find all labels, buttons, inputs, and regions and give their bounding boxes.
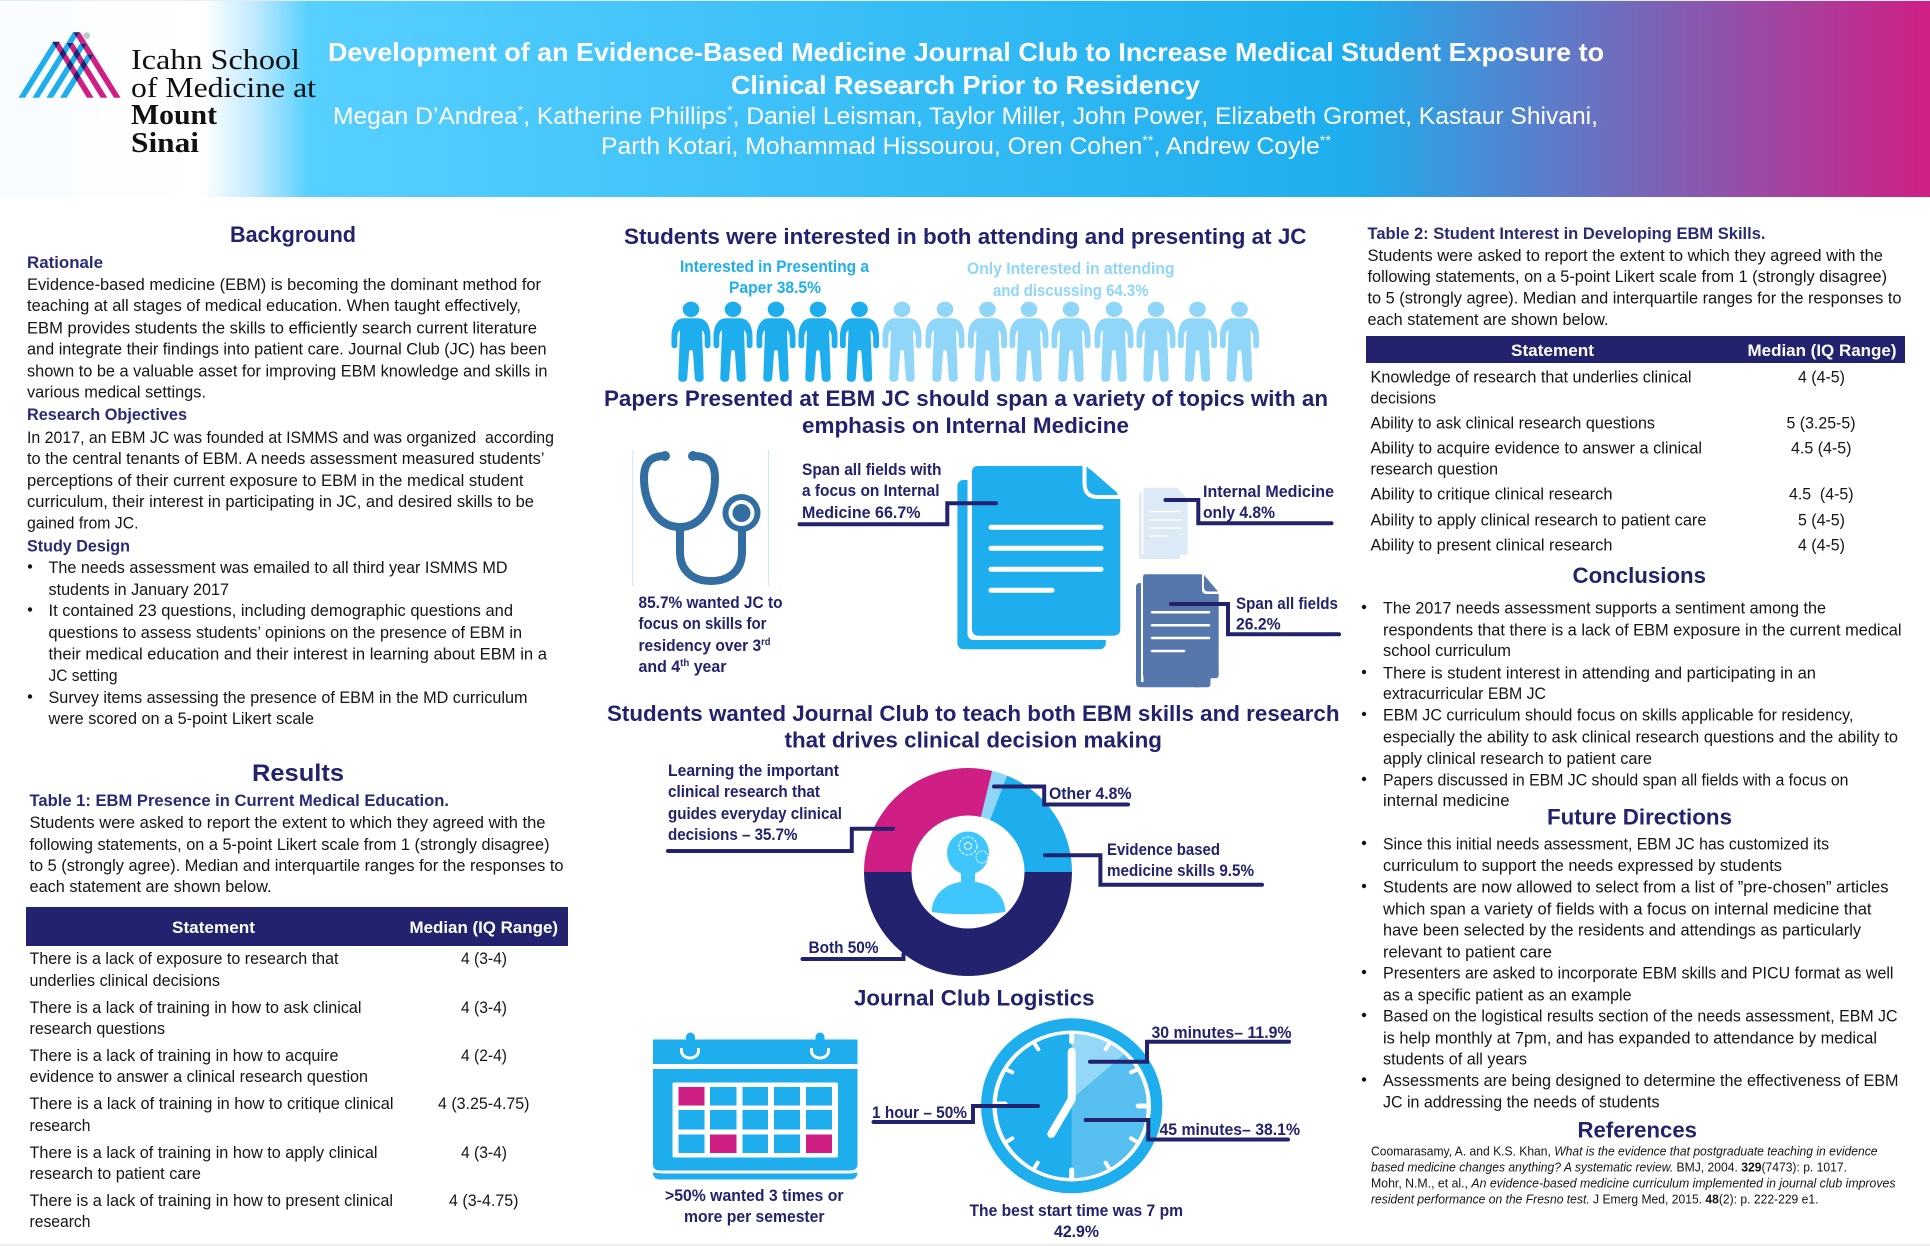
leader line: internal medicine only [1166, 500, 1332, 523]
bullet list: conclusions: apply clinical research to patient care [1383, 750, 1652, 768]
heading: Results: Results [252, 760, 344, 787]
table 1 rows: There is a lack of training in how to present clinical [30, 1192, 393, 1210]
bullet list: study design: students in January 2017 [48, 581, 229, 599]
bullet list: conclusions: respondents that there is a lack of EBM exposure in the current medical [1383, 622, 1902, 640]
segment: both 50% [864, 872, 1072, 976]
label: presenting 38.5%: Paper 38.5% [729, 279, 821, 297]
authors: Megan D’Andrea [333, 103, 513, 130]
text: best start time [970, 1202, 1183, 1241]
text block: rationale: various medical settings. [27, 384, 206, 402]
bullet list: conclusions: extracurricular EBM JC [1383, 685, 1546, 703]
table 1 rows: research [30, 1117, 90, 1135]
panel: journal club logistics [653, 986, 1300, 1241]
text block: reference list: based medicine changes anything? A systematic review. BMJ, 2004. 329(7473): p. 1017. [1371, 1160, 1847, 1174]
authors: * [518, 102, 524, 118]
text block: rationale: teaching at all stages of medical education. When taught effectively, [27, 297, 521, 315]
table 2 rows: 4.5 (4-5) [1791, 440, 1852, 458]
text: frequency: >50% wanted 3 times or [665, 1187, 844, 1205]
table 2 rows: research question [1370, 460, 1498, 478]
text block: reference list [1371, 1144, 1896, 1206]
authors: , Katherine Phillips [523, 103, 727, 130]
text block: rationale: Evidence-based medicine (EBM) is becoming the dominant method for [27, 276, 542, 294]
text block: table 2 intro: to 5 (strongly agree). Median and interquartile ranges for the responses to [1368, 290, 1902, 308]
subheading: Rationale: Rationale [27, 254, 103, 272]
table 1 header [26, 907, 568, 946]
icon: calendar [653, 1032, 858, 1180]
text block: table 2 intro: following statements, on a 5-point Likert scale from 1 (strongly disagree) [1368, 268, 1887, 286]
bullet list: future directions: Presenters are asked to incorporate EBM skills and PICU format as well [1383, 964, 1894, 982]
pictogram: 14 people [672, 302, 1259, 382]
leader line: other [994, 786, 1128, 804]
callout: span all fields 26.2%: 26.2% [1236, 615, 1281, 633]
text block: rationale: and integrate their findings into patient care. Journal Club (JC) has been [27, 340, 546, 358]
table 1 rows: There is a lack of training in how to acquire [30, 1047, 338, 1065]
table 1 rows: research [30, 1213, 90, 1231]
icon: small light document [1139, 488, 1188, 559]
bullet list: study design [28, 559, 548, 728]
panel: conclusions [1362, 563, 1902, 810]
text: skills focus 85.7%: focus on skills for [638, 615, 767, 633]
bullet list: conclusions: The 2017 needs assessment supports a sentiment among the [1383, 600, 1826, 618]
heading: paper topics: emphasis on Internal Medicine [802, 413, 1129, 438]
logo wordmark: of Medicine at [131, 72, 316, 104]
authors: ** [1320, 132, 1332, 148]
panel: future directions [1362, 804, 1898, 1112]
text: skills focus 85.7%: 85.7% wanted JC to [638, 594, 782, 612]
heading: Background: Background [230, 222, 356, 247]
leader line: EBM skills [1045, 855, 1262, 885]
callout: learning clinical research 35.7%: guides everyday clinical [668, 805, 842, 823]
panel: results and table 1 [26, 760, 568, 1231]
callout: internal medicine only 4.8%: Internal Medicine [1203, 483, 1334, 501]
bullet list: conclusions: EBM JC curriculum should focus on skills applicable for residency, [1383, 706, 1854, 724]
logo: Icahn School of Medicine at Mount Sinai [18, 32, 316, 159]
table 1 header: Median (IQ Range) [410, 919, 558, 937]
table 2 [1366, 336, 1905, 554]
leader line: 1 hour [874, 1106, 1038, 1122]
table 2 rows: decisions [1370, 390, 1436, 408]
label: 1 hour 50%: 1 hour – 50% [872, 1104, 967, 1122]
text: skills focus 85.7%: residency over 3 [638, 637, 769, 655]
title: Clinical Research Prior to Residency [731, 70, 1201, 100]
bullet list: study design: It contained 23 questions, including demographic questions and [48, 602, 513, 620]
table 2 header: Statement [1511, 342, 1595, 360]
callout: EBM skills 9.5%: medicine skills 9.5% [1107, 862, 1254, 880]
table 1 rows: There is a lack of exposure to research that [30, 950, 339, 968]
bullet list: conclusions: especially the ability to ask clinical research questions and the ability to [1383, 728, 1898, 746]
text: skills focus 85.7% [638, 594, 782, 676]
sector: 30 minutes [1072, 1034, 1124, 1099]
table 2 header [1366, 336, 1905, 363]
icon: clock [981, 1018, 1162, 1193]
text block: table 2 intro [1368, 247, 1902, 329]
bullet list: study design: JC setting [48, 667, 118, 685]
text block: reference list: Coomarasamy, A. and K.S. Khan, What is the evidence that postgraduate teaching in evidence [1371, 1144, 1878, 1158]
table 1 rows: underlies clinical decisions [30, 972, 220, 990]
logo wordmark [131, 44, 316, 159]
text block: rationale: EBM provides students the skills to efficiently search current literature [27, 320, 537, 338]
text: skills focus 85.7%: and 4 [638, 658, 682, 676]
bullet list: conclusions [1362, 600, 1902, 810]
text block: research objectives [27, 429, 554, 532]
icon: logo stripes [18, 32, 121, 98]
label: presenting 38.5%: Interested in Presenting a [680, 258, 870, 276]
logo wordmark: Sinai [131, 127, 199, 159]
label: 30 minutes 11.9%: 30 minutes– 11.9% [1152, 1024, 1292, 1042]
leader line: span all fields [1171, 604, 1339, 634]
bullet list: future directions: Assessments are being designed to determine the effectiveness of EBM [1383, 1072, 1898, 1090]
bullet list: future directions: as a specific patient as an example [1383, 986, 1632, 1004]
subheading: Table 2: Table 2: Student Interest in Developing EBM Skills. [1368, 225, 1766, 243]
callout: EBM skills 9.5%: Evidence based [1107, 841, 1220, 859]
authors: * [727, 102, 733, 118]
text block: table 1 intro: each statement are shown below. [30, 878, 272, 896]
table 2 rows: 5 (3.25-5) [1786, 414, 1856, 432]
authors: , Daniel Leisman, Taylor Miller, John Power, Elizabeth Gromet, Kastaur Shivani, [733, 103, 1598, 130]
callout: learning clinical research 35.7% [668, 762, 842, 844]
panel: what JC should teach [607, 701, 1340, 976]
text: skills focus 85.7%: rd [761, 637, 770, 648]
callout: all fields with internal medicine focus: Medicine 66.7% [802, 504, 921, 522]
leader line: large document [800, 503, 996, 524]
heading: Future Directions: Future Directions [1547, 804, 1732, 830]
table 2 rows: Ability to present clinical research [1370, 536, 1612, 554]
callout: other 4.8%: Other 4.8% [1049, 785, 1132, 803]
bullet list: study design: Survey items assessing the presence of EBM in the MD curriculum [48, 689, 528, 707]
text block: research objectives: curriculum, their interest in participating in JC, and desired skills to be [27, 493, 534, 511]
leader line: clinical research [668, 829, 893, 851]
leader line: both [802, 954, 904, 959]
heading: logistics: Journal Club Logistics [854, 986, 1094, 1010]
bullet list: future directions: JC in addressing the needs of students [1383, 1094, 1660, 1112]
heading: EBM skills and research: that drives clinical decision making [784, 728, 1162, 752]
callout: learning clinical research 35.7%: decisions – 35.7% [668, 826, 798, 844]
icons: presenting people [672, 302, 879, 382]
callout: both 50%: Both 50% [808, 939, 879, 957]
text block: research objectives: to the central tenants of EBM. A needs assessment measured students’ [27, 450, 544, 468]
heading: paper topics: Papers Presented at EBM JC should span a variety of topics with an [604, 386, 1328, 411]
callout: span all fields 26.2% [1236, 595, 1338, 633]
label: presenting 38.5% [680, 258, 870, 297]
table 2 rows: Ability to critique clinical research [1370, 486, 1612, 504]
table 2 rows: 4.5 (4-5) [1789, 486, 1854, 504]
table 2 rows [1370, 368, 1856, 554]
panel: references [1371, 1118, 1896, 1206]
title [328, 37, 1604, 100]
panel: paper topics [604, 386, 1339, 687]
text: frequency [665, 1187, 844, 1226]
heading: attending and presenting: Students were interested in both attending and presenting at JC [624, 224, 1307, 249]
bullet list: future directions: which span a variety of fields with a focus on internal medicine that [1382, 900, 1872, 918]
text block: reference list: Mohr, N.M., et al., An evidence-based medicine curriculum implemented in journal club improves [1371, 1176, 1896, 1190]
table 1 rows: There is a lack of training in how to ask clinical [30, 999, 362, 1017]
bullet list: future directions: Students are now allowed to select from a list of ”pre-chosen” articles [1383, 878, 1888, 896]
label: attending 64.3%: Only Interested in attending [967, 260, 1174, 278]
label: attending 64.3%: and discussing 64.3% [993, 282, 1149, 300]
bullet list: future directions: have been selected by the residents and attendings as particularly [1383, 922, 1862, 940]
table 1 rows: 4 (2-4) [461, 1047, 507, 1065]
heading: Conclusions: Conclusions [1572, 563, 1706, 588]
bullet list: future directions: Based on the logistical results section of the needs assessment, EBM JC [1383, 1008, 1898, 1026]
bullet list: future directions: curriculum to support the needs expressed by students [1383, 857, 1782, 875]
table 2 rows: 4 (4-5) [1798, 536, 1845, 554]
bullet list: conclusions: Papers discussed in EBM JC should span all fields with a focus on [1383, 772, 1848, 790]
text block: table 1 intro: following statements, on a 5-point Likert scale from 1 (strongly disagree) [30, 836, 550, 854]
table 2 header: Median (IQ Range) [1748, 342, 1896, 360]
heading: EBM skills and research: Students wanted Journal Club to teach both EBM skills and research [607, 701, 1340, 726]
bullet list: conclusions: There is student interest in attending and participating in an [1383, 664, 1816, 682]
table 2 rows: Ability to ask clinical research questions [1370, 414, 1655, 432]
bullet list: conclusions: internal medicine [1383, 792, 1510, 810]
callout: all fields with internal medicine focus: Span all fields with [802, 461, 942, 479]
sector: 45 minutes [1072, 1054, 1147, 1178]
table 1 rows: evidence to answer a clinical research question [30, 1068, 368, 1086]
icon: stethoscope [633, 450, 768, 586]
callout: internal medicine only 4.8% [1203, 483, 1334, 522]
title: Development of an Evidence-Based Medicine Journal Club to Increase Medical Student Exposure to [328, 37, 1604, 67]
logo wordmark: Mount [131, 99, 217, 131]
table 2 rows: 4 (4-5) [1798, 368, 1845, 386]
text: best start time: 42.9% [1054, 1223, 1099, 1241]
bullet list: future directions: relevant to patient care [1383, 944, 1552, 962]
donut chart [864, 768, 1072, 976]
segment: EBM skills [990, 776, 1072, 872]
callout: learning clinical research 35.7%: Learning the important [668, 762, 839, 780]
text block: table 1 intro: to 5 (strongly agree). Median and interquartile ranges for the responses to [30, 857, 564, 875]
label: 45 minutes 38.1%: 45 minutes– 38.1% [1160, 1121, 1300, 1139]
authors [333, 102, 1598, 160]
subheading: Research Objectives: Research Objectives [27, 406, 187, 424]
text block: reference list: resident performance on the Fresno test. J Emerg Med, 2015. 48(2): p. 222-229 e1. [1371, 1192, 1818, 1206]
text block: research objectives: In 2017, an EBM JC was founded at ISMMS and was organized according [27, 429, 554, 447]
bullet list: future directions [1362, 836, 1898, 1112]
table 1 rows [30, 950, 530, 1231]
text block: table 2 intro: each statement are shown below. [1368, 311, 1608, 329]
table 1 rows: 4 (3-4) [461, 950, 507, 968]
text: skills focus 85.7%: th [680, 658, 689, 669]
icon: person with gears [932, 832, 1005, 914]
text block: rationale [27, 276, 548, 402]
bullet list: future directions: Since this initial needs assessment, EBM JC has customized its [1383, 836, 1829, 854]
table 2 rows: Ability to apply clinical research to patient care [1370, 512, 1706, 530]
text: skills focus 85.7%: year [689, 658, 727, 676]
icon: dark document [1136, 574, 1219, 687]
clock hands [1051, 1052, 1072, 1134]
icon: large document [957, 464, 1128, 649]
logo wordmark: Icahn School [131, 44, 300, 76]
table 1 rows: There is a lack of training in how to critique clinical [30, 1095, 394, 1113]
authors: ** [1142, 132, 1154, 148]
table 1 rows: 4 (3-4) [461, 1144, 507, 1162]
heading: paper topics [604, 386, 1328, 438]
bullet list: study design: their medical education and their interest in learning about EBM in a [48, 646, 548, 664]
table 1 [26, 907, 568, 1231]
text block: rationale: shown to be a valuable asset for improving EBM knowledge and skills in [27, 362, 548, 380]
table 1 rows: 4 (3-4.75) [449, 1192, 518, 1210]
bullet list: study design: The needs assessment was emailed to all third year ISMMS MD [48, 559, 508, 577]
segment: other 4.8% [981, 771, 1007, 820]
bullet list: conclusions: school curriculum [1383, 642, 1511, 660]
text block: table 1 intro: Students were asked to report the extent to which they agreed with the [30, 814, 546, 832]
callout: internal medicine only 4.8%: only 4.8% [1203, 504, 1275, 522]
callout: span all fields 26.2%: Span all fields [1236, 595, 1338, 613]
authors: , Andrew Coyle [1154, 133, 1320, 160]
text block: table 1 intro [30, 814, 564, 896]
text: frequency: more per semester [684, 1208, 825, 1226]
subheading: Table 1: Table 1: EBM Presence in Current Medical Education. [30, 792, 449, 810]
text: best start time: The best start time was 7 pm [970, 1202, 1183, 1220]
callout: learning clinical research 35.7%: clinical research that [668, 783, 820, 801]
panel: table 2 [1366, 225, 1905, 554]
callout: EBM skills 9.5% [1107, 841, 1254, 880]
table 2 rows: 5 (4-5) [1798, 512, 1845, 530]
panel: interest in attending and presenting [624, 224, 1307, 382]
label: attending 64.3% [967, 260, 1174, 300]
table 2 rows: Ability to acquire evidence to answer a clinical [1370, 440, 1702, 458]
table 1 rows: There is a lack of training in how to apply clinical [30, 1144, 378, 1162]
table 1 rows: 4 (3.25-4.75) [438, 1095, 530, 1113]
leader line: 30 minutes [1090, 1042, 1289, 1062]
panel: background [27, 222, 554, 728]
header banner [0, 0, 1930, 197]
subheading: Study Design: Study Design [27, 538, 130, 556]
heading: References: References [1578, 1118, 1697, 1142]
bullet list: future directions: students of all years [1383, 1050, 1527, 1068]
bullet list: study design: questions to assess students’ opinions on the presence of EBM in [48, 624, 522, 642]
table 1 rows: research questions [30, 1020, 165, 1038]
table 1 header: Statement [172, 919, 256, 937]
table 2 rows: Knowledge of research that underlies clinical [1370, 368, 1692, 386]
segment: clinical research 35.7% [864, 768, 992, 872]
bullet list: future directions: is help monthly at 7pm, and has expanded to attendance by medical [1383, 1030, 1877, 1048]
table 1 rows: 4 (3-4) [461, 999, 507, 1017]
bullet list: study design: were scored on a 5-point Likert scale [48, 710, 314, 728]
callout: all fields with internal medicine focus: a focus on Internal [802, 482, 940, 500]
heading: EBM skills and research [607, 701, 1340, 752]
table 1 rows: research to patient care [30, 1165, 201, 1183]
text block: research objectives: gained from JC. [27, 514, 138, 532]
leader line: 45 minutes [1086, 1120, 1288, 1140]
callout: all fields with internal medicine focus [802, 461, 942, 522]
text block: research objectives: perceptions of their current exposure to EBM in the medical student [27, 472, 524, 490]
text block: table 2 intro: Students were asked to report the extent to which they agreed with the [1368, 247, 1883, 265]
icons: attending people [882, 302, 1259, 382]
authors: Parth Kotari, Mohammad Hissourou, Oren Cohen [601, 133, 1127, 160]
